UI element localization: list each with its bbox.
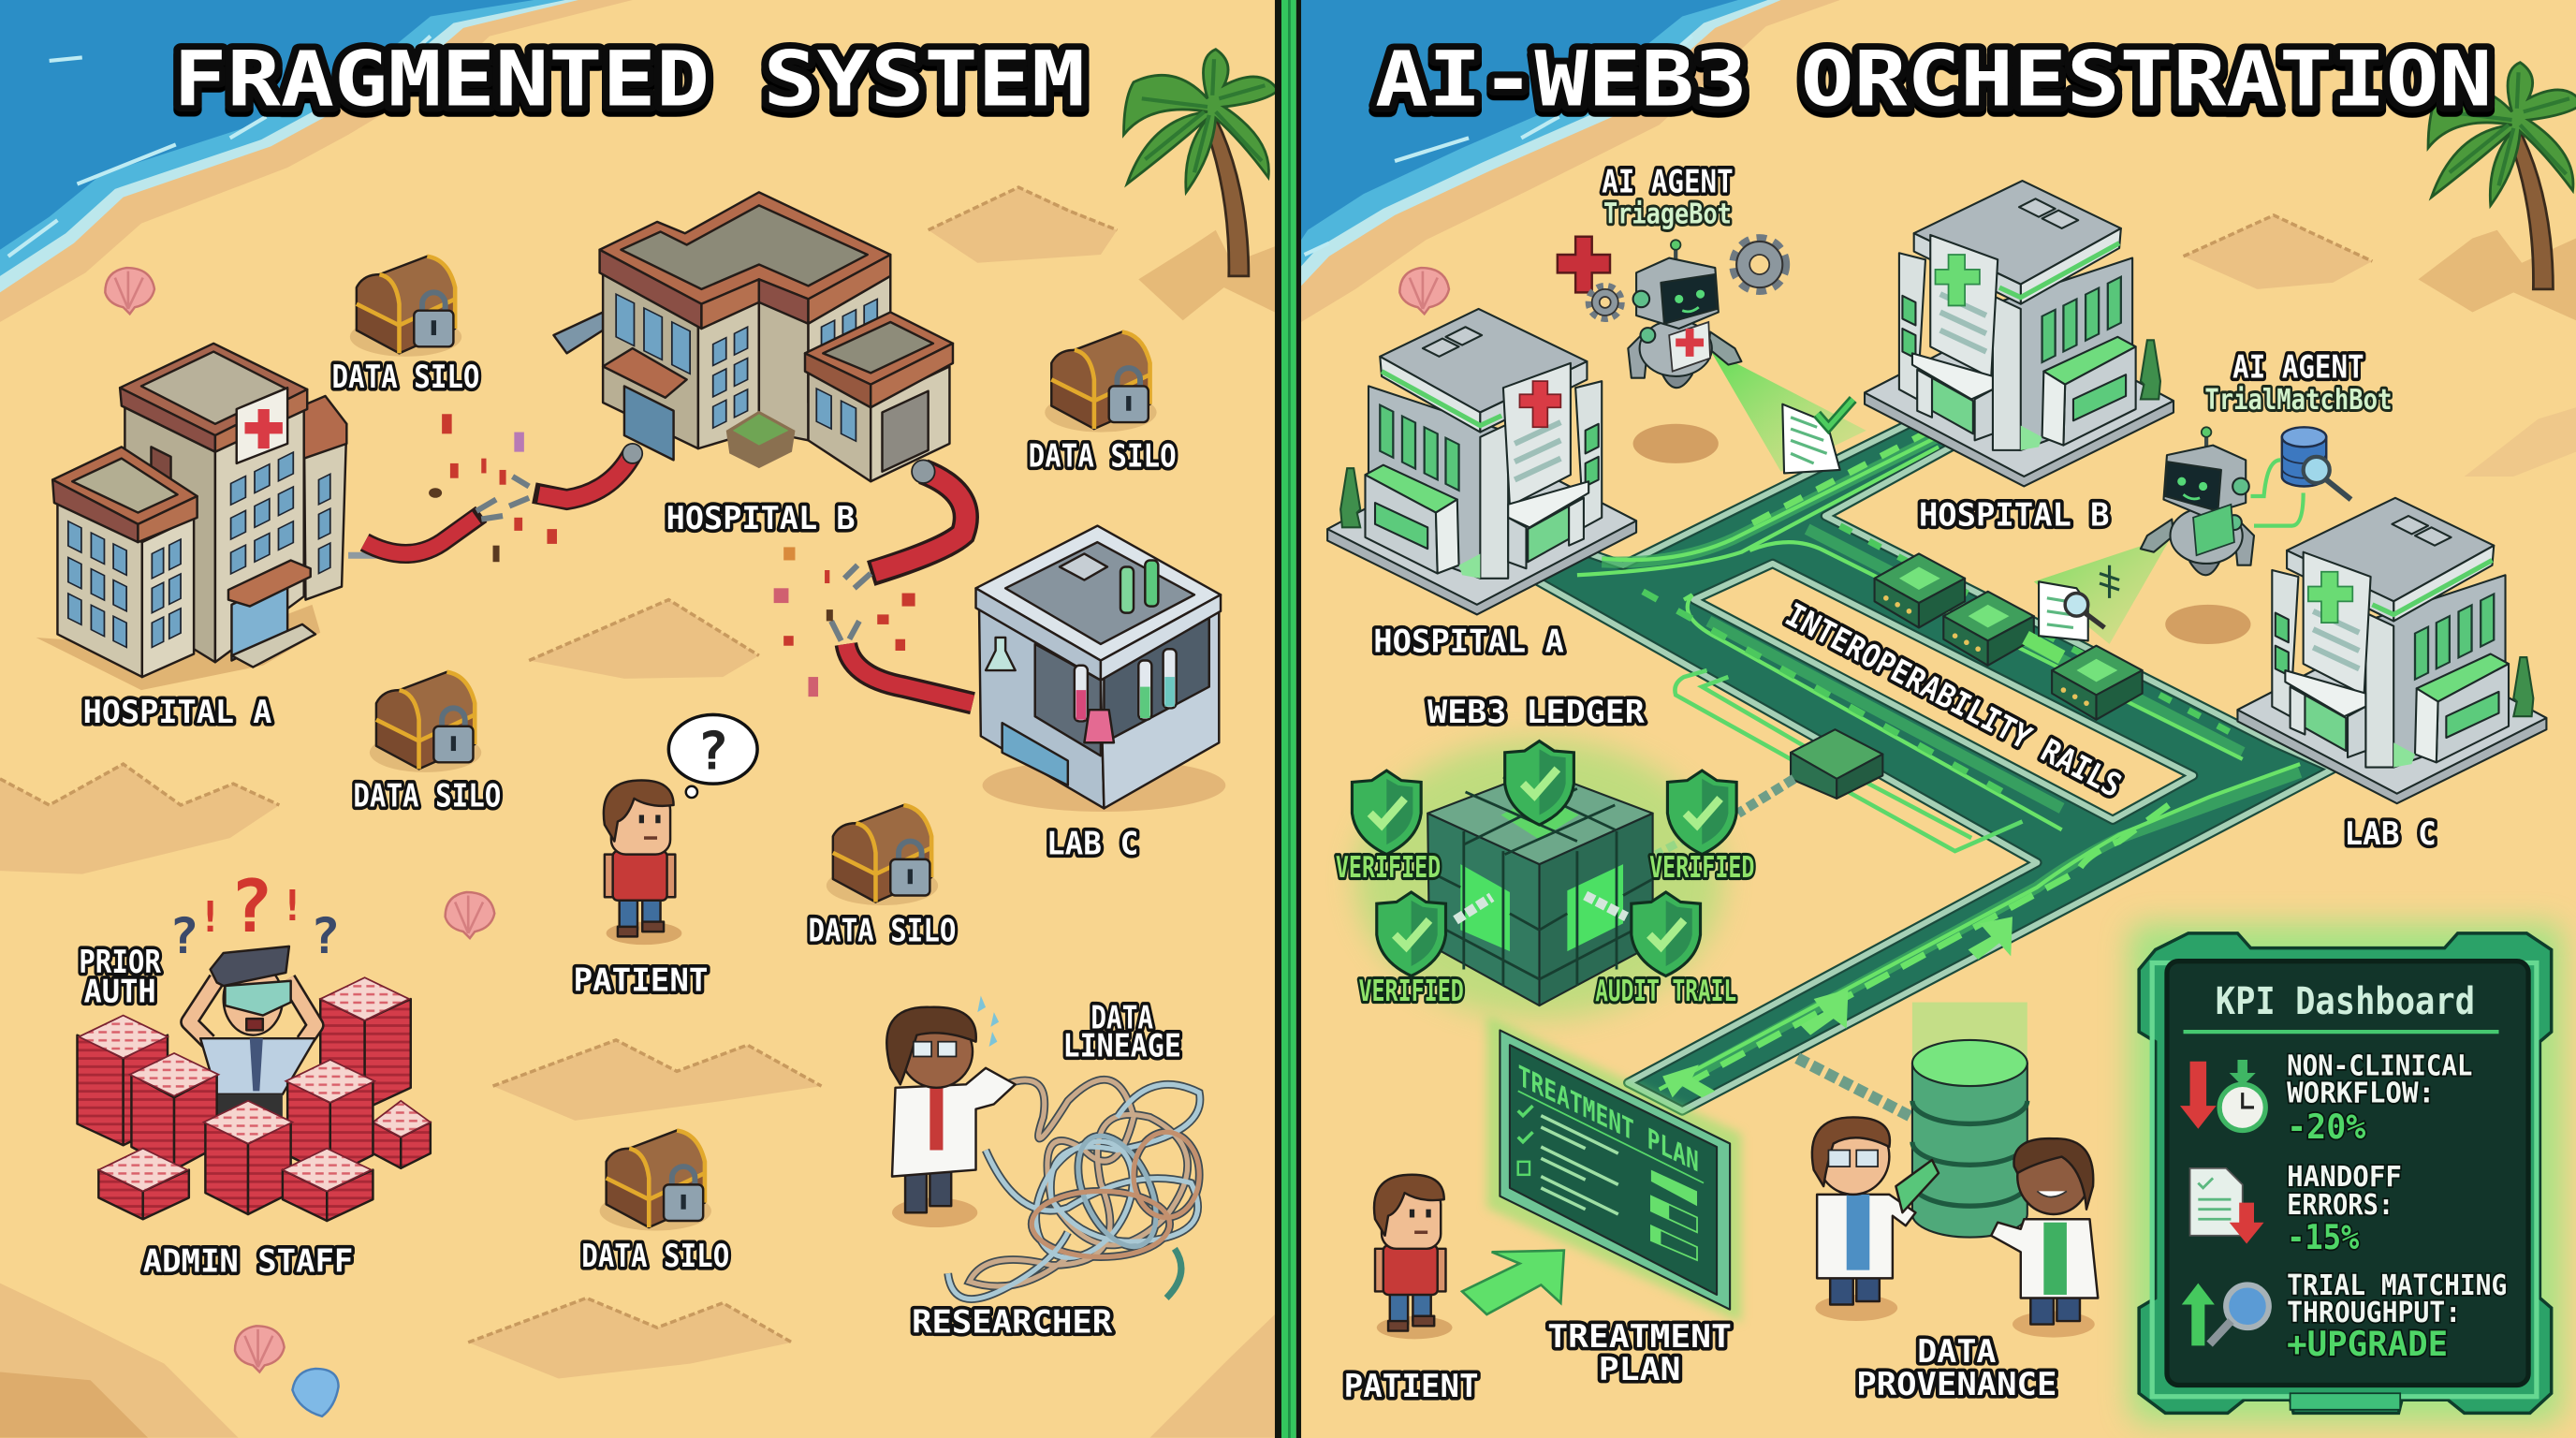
- title: fragmented system: FRAGMENTED SYSTEM: [173, 36, 1085, 124]
- sand dunes left panel: [0, 187, 1275, 1438]
- labels: left panel: DATA SILO: [353, 778, 501, 815]
- labels: left panel: AUTH: [84, 974, 156, 1011]
- hospital A fragmented: [37, 344, 346, 690]
- chests: data silos: [350, 257, 1157, 1231]
- labels: left panel: HOSPITAL A: [83, 694, 272, 731]
- labels: right panel: WEB3 LEDGER: [1427, 694, 1645, 731]
- patient fragmented with thought bubble: ?: [697, 721, 729, 782]
- KPI row: handoff errors: -15%: [2287, 1217, 2359, 1257]
- hospital B orchestrated: [1865, 181, 2174, 486]
- brown ground patches: [1633, 424, 2250, 644]
- patient fragmented with thought bubble: [604, 714, 757, 945]
- rail connector block and chain: [1656, 729, 1882, 855]
- labels: left panel: ADMIN STAFF: [143, 1242, 353, 1280]
- KPI row: non-clinical workflow: NON-CLINICAL: [2287, 1050, 2472, 1083]
- broken pipes and sparks: [348, 414, 973, 703]
- admin staff surrounded by paper stacks: ?: [169, 908, 198, 965]
- web3 ledger cube with verified shields: [1352, 740, 1736, 1019]
- labels: right panel: AI AGENT: [1602, 163, 1734, 200]
- labels: right panel: VERIFIED: [1358, 975, 1464, 1008]
- sand dune right panel: [2184, 215, 2576, 477]
- labels: left panel: DATA SILO: [581, 1238, 729, 1275]
- treatment plan board: [1486, 1016, 1741, 1323]
- hospital B fragmented: [553, 192, 953, 481]
- AI agent TriageBot with beam and checklist: [1558, 237, 1866, 473]
- labels: left panel: HOSPITAL B: [666, 500, 856, 537]
- labels: right panel: PLAN: [1599, 1351, 1680, 1388]
- labels: left panel: RESEARCHER: [912, 1303, 1113, 1341]
- labels: right panel: VERIFIED: [1336, 851, 1441, 885]
- labels: right panel: [1336, 163, 2437, 1405]
- labels: left panel: PATIENT: [574, 961, 708, 999]
- palm shadows: [1138, 230, 2576, 320]
- interoperability rails network: [1533, 418, 2333, 1110]
- lab C fragmented: [976, 526, 1225, 812]
- admin staff surrounded by paper stacks: !: [198, 892, 223, 942]
- labels: left panel: [79, 359, 1181, 1341]
- labels: right panel: HOSPITAL A: [1373, 624, 1564, 661]
- KPI row: handoff errors: HANDOFF: [2287, 1161, 2402, 1194]
- KPI row: trial matching throughput: +UPGRADE: [2287, 1324, 2448, 1364]
- AI agent TrialMatchBot with beam, database and report: [2034, 427, 2351, 644]
- arrow: patient to treatment plan: [1462, 1251, 1564, 1314]
- data provenance database and scientists: [1797, 1003, 2098, 1338]
- admin staff surrounded by paper stacks: ?: [229, 865, 273, 949]
- panel: orchestration sea and shore: [1301, 0, 1840, 322]
- labels: right panel: AUDIT TRAIL: [1595, 975, 1736, 1008]
- labels: right panel: PATIENT: [1344, 1368, 1479, 1405]
- admin staff surrounded by paper stacks: !: [280, 881, 305, 931]
- labels: left panel: LAB C: [1046, 826, 1138, 863]
- labels: left panel: PRIOR: [79, 944, 161, 981]
- KPI row: handoff errors: ERRORS:: [2287, 1189, 2393, 1222]
- admin staff surrounded by paper stacks: ?: [311, 908, 340, 965]
- labels: right panel: HOSPITAL B: [1919, 497, 2110, 535]
- hospital A orchestrated: [1327, 309, 1636, 614]
- KPI row: trial matching throughput: THROUGHPUT:: [2287, 1297, 2461, 1329]
- KPI row: non-clinical workflow: [2180, 1050, 2472, 1147]
- labels: left panel: DATA SILO: [332, 359, 479, 396]
- shells: [105, 268, 1449, 1416]
- researcher with tangled data cables: [886, 996, 1200, 1299]
- KPI row: non-clinical workflow: -20%: [2287, 1107, 2365, 1147]
- KPI row: trial matching throughput: TRIAL MATCHING: [2287, 1269, 2507, 1302]
- treatment plan board: TREATMENT PLAN: [1518, 1060, 1699, 1180]
- labels: right panel: TriageBot: [1603, 198, 1732, 231]
- admin staff surrounded by paper stacks: [77, 865, 431, 1221]
- lab C orchestrated: [2237, 498, 2546, 803]
- icon: palm tree right: [2428, 63, 2576, 289]
- KPI row: handoff errors: [2190, 1161, 2402, 1257]
- KPI row: trial matching throughput: [2182, 1269, 2507, 1364]
- interoperability rail chips: [1875, 553, 2143, 720]
- labels: right panel: INTEROPERABILITY RAILS: [1779, 596, 2128, 805]
- labels: right panel: DATA: [1917, 1333, 1997, 1371]
- labels: left panel: DATA SILO: [1029, 437, 1177, 475]
- labels: right panel: AI AGENT: [2232, 349, 2364, 387]
- divider: [1275, 0, 1301, 1438]
- KPI row: non-clinical workflow: WORKFLOW:: [2287, 1078, 2435, 1110]
- labels: right panel: TrialMatchBot: [2204, 384, 2392, 417]
- icon: palm tree left: [1123, 50, 1278, 276]
- labels: left panel: LINEAGE: [1063, 1027, 1181, 1064]
- patient orchestrated: [1374, 1175, 1453, 1339]
- panel: fragmented system sea and shore: [0, 0, 633, 322]
- labels: left panel: DATA: [1090, 1000, 1153, 1037]
- KPI dashboard panel: [2130, 923, 2563, 1423]
- KPI dashboard title: KPI Dashboard: [2216, 979, 2475, 1023]
- labels: right panel: PROVENANCE: [1856, 1366, 2056, 1403]
- labels: left panel: DATA SILO: [809, 913, 956, 950]
- labels: right panel: VERIFIED: [1649, 851, 1754, 885]
- labels: right panel: LAB C: [2345, 815, 2437, 853]
- labels: right panel: TREATMENT: [1547, 1318, 1732, 1356]
- title: AI-web3 orchestration: AI-WEB3 ORCHESTRATION: [1375, 36, 2492, 124]
